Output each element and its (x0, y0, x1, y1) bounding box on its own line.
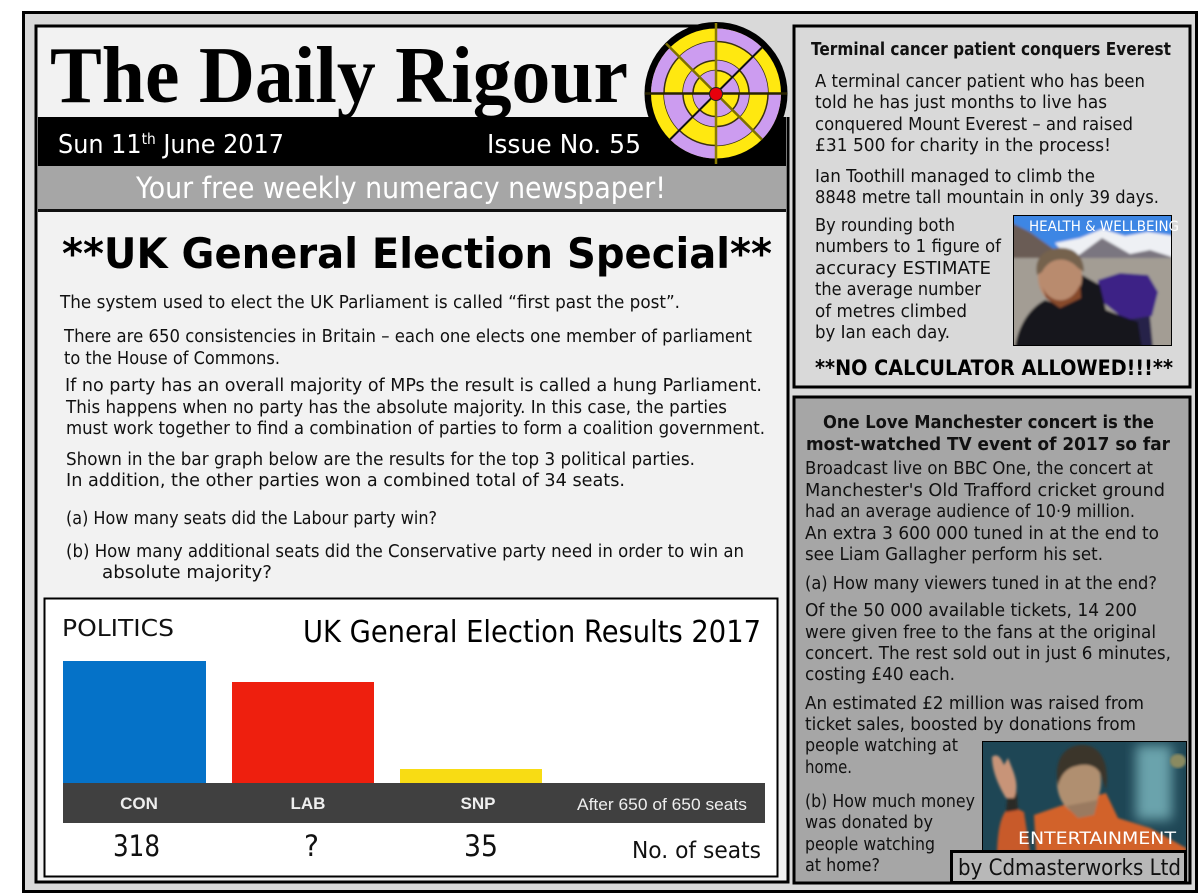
panel: main election article (36, 22, 791, 882)
photo: Liam Gallagher performing (982, 741, 1187, 852)
story text: £31 500 for charity in the process! (815, 135, 1111, 156)
story text: Ian Toothill managed to climb the (815, 166, 1095, 187)
article headline: **UK General Election Special** (62, 229, 772, 278)
seat values: 35 (464, 829, 498, 863)
story text: A terminal cancer patient who has been (815, 71, 1145, 92)
story text: Broadcast live on BBC One, the concert at (805, 458, 1153, 479)
article body text: (a) How many seats did the Labour party win? (66, 508, 437, 529)
photo: climber on Everest (1010, 212, 1179, 348)
seat values: No. of seats (632, 838, 761, 864)
section label: entertainment: ENTERTAINMENT (1018, 829, 1177, 849)
story text: by Ian each day. (815, 322, 950, 343)
story text: see Liam Gallagher perform his set. (805, 544, 1103, 565)
story text: concert. The rest sold out in just 6 minutes, (805, 643, 1171, 664)
article body text: The system used to elect the UK Parliament is called “first past the post”. (59, 292, 680, 313)
no calculator notice: **NO CALCULATOR ALLOWED!!!** (815, 356, 1173, 380)
article body text: to the House of Commons. (64, 348, 280, 369)
headline (806, 412, 1170, 455)
story text: Of the 50 000 available tickets, 14 200 (805, 600, 1137, 621)
axis band: SNP (461, 794, 495, 813)
seat values: ? (304, 829, 319, 863)
icon: dartboard logo (644, 22, 788, 165)
credit box: by Cdmasterworks Ltd (958, 856, 1181, 881)
article body text: This happens when no party has the absolute majority. In this case, the parties (65, 397, 727, 418)
seat values: 318 (113, 829, 160, 863)
story text: An extra 3 600 000 tuned in at the end to (805, 523, 1159, 544)
story text: of metres climbed (815, 301, 967, 322)
bar: Labour (232, 682, 374, 783)
story text: home. (805, 757, 852, 778)
panel: Manchester concert story (794, 397, 1190, 883)
story text: the average number (815, 279, 982, 300)
seat values (113, 829, 761, 864)
date and issue bar: th (142, 130, 156, 148)
article body text: (b) How many additional seats did the Conservative party need in order to win an (66, 541, 744, 562)
axis band: After 650 of 650 seats (577, 795, 747, 814)
story text: By rounding both (815, 215, 955, 236)
story text: at home? (805, 855, 880, 876)
story text: accuracy ESTIMATE (815, 258, 991, 279)
date and issue bar (38, 117, 786, 166)
story text (805, 458, 1171, 876)
article body text (59, 292, 765, 583)
bar chart: election results (44, 598, 778, 876)
story text: (b) How much money (805, 791, 975, 812)
date and issue bar: Issue No. 55 (487, 130, 641, 160)
axis band: LAB (291, 794, 325, 813)
article body text: absolute majority? (102, 562, 272, 583)
bar: SNP (400, 769, 542, 783)
date and issue bar: Sun 11 (58, 130, 149, 160)
headline: most-watched TV event of 2017 so far (806, 434, 1170, 455)
bar: Conservative (63, 661, 206, 783)
chart title: UK General Election Results 2017 (303, 615, 761, 650)
story text: numbers to 1 figure of (815, 236, 1002, 257)
date and issue bar: June 2017 (156, 130, 284, 160)
story text: was donated by (805, 812, 933, 833)
section label: politics: POLITICS (62, 616, 174, 642)
story text: costing £40 each. (805, 664, 955, 685)
article body text: In addition, the other parties won a combined total of 34 seats. (66, 470, 625, 491)
article body text: must work together to find a combination of parties to form a coalition government. (66, 418, 765, 439)
story text: were given free to the fans at the original (805, 622, 1156, 643)
article body text: Shown in the bar graph below are the results for the top 3 political parties. (66, 449, 695, 470)
story text: people watching (805, 834, 935, 855)
newspaper title: The Daily Rigour (50, 32, 628, 120)
axis band: CON (120, 794, 158, 813)
tagline bar (38, 166, 786, 212)
article body text: If no party has an overall majority of MPs the result is called a hung Parliament. (65, 375, 762, 396)
tagline bar: Your free weekly numeracy newspaper! (135, 171, 666, 205)
story text: 8848 metre tall mountain in only 39 days. (815, 187, 1159, 208)
story text: told he has just months to live has (815, 92, 1107, 113)
masthead (38, 22, 791, 212)
panel: Everest story (794, 26, 1190, 387)
article body text: There are 650 consistencies in Britain – each one elects one member of parliament (63, 326, 752, 347)
story text: people watching at (805, 735, 958, 756)
story text: had an average audience of 10·9 million. (805, 501, 1135, 522)
story text: ticket sales, boosted by donations from (805, 714, 1136, 735)
story text: Manchester's Old Trafford cricket ground (805, 480, 1165, 501)
story text (815, 71, 1159, 343)
story text: conquered Mount Everest – and raised (815, 114, 1133, 135)
axis band (63, 783, 765, 823)
headline: One Love Manchester concert is the (823, 412, 1154, 433)
section label: health and wellbeing: HEALTH & WELLBEING (1029, 219, 1179, 235)
story text: An estimated £2 million was raised from (805, 693, 1144, 714)
story text: (a) How many viewers tuned in at the end? (805, 573, 1157, 594)
